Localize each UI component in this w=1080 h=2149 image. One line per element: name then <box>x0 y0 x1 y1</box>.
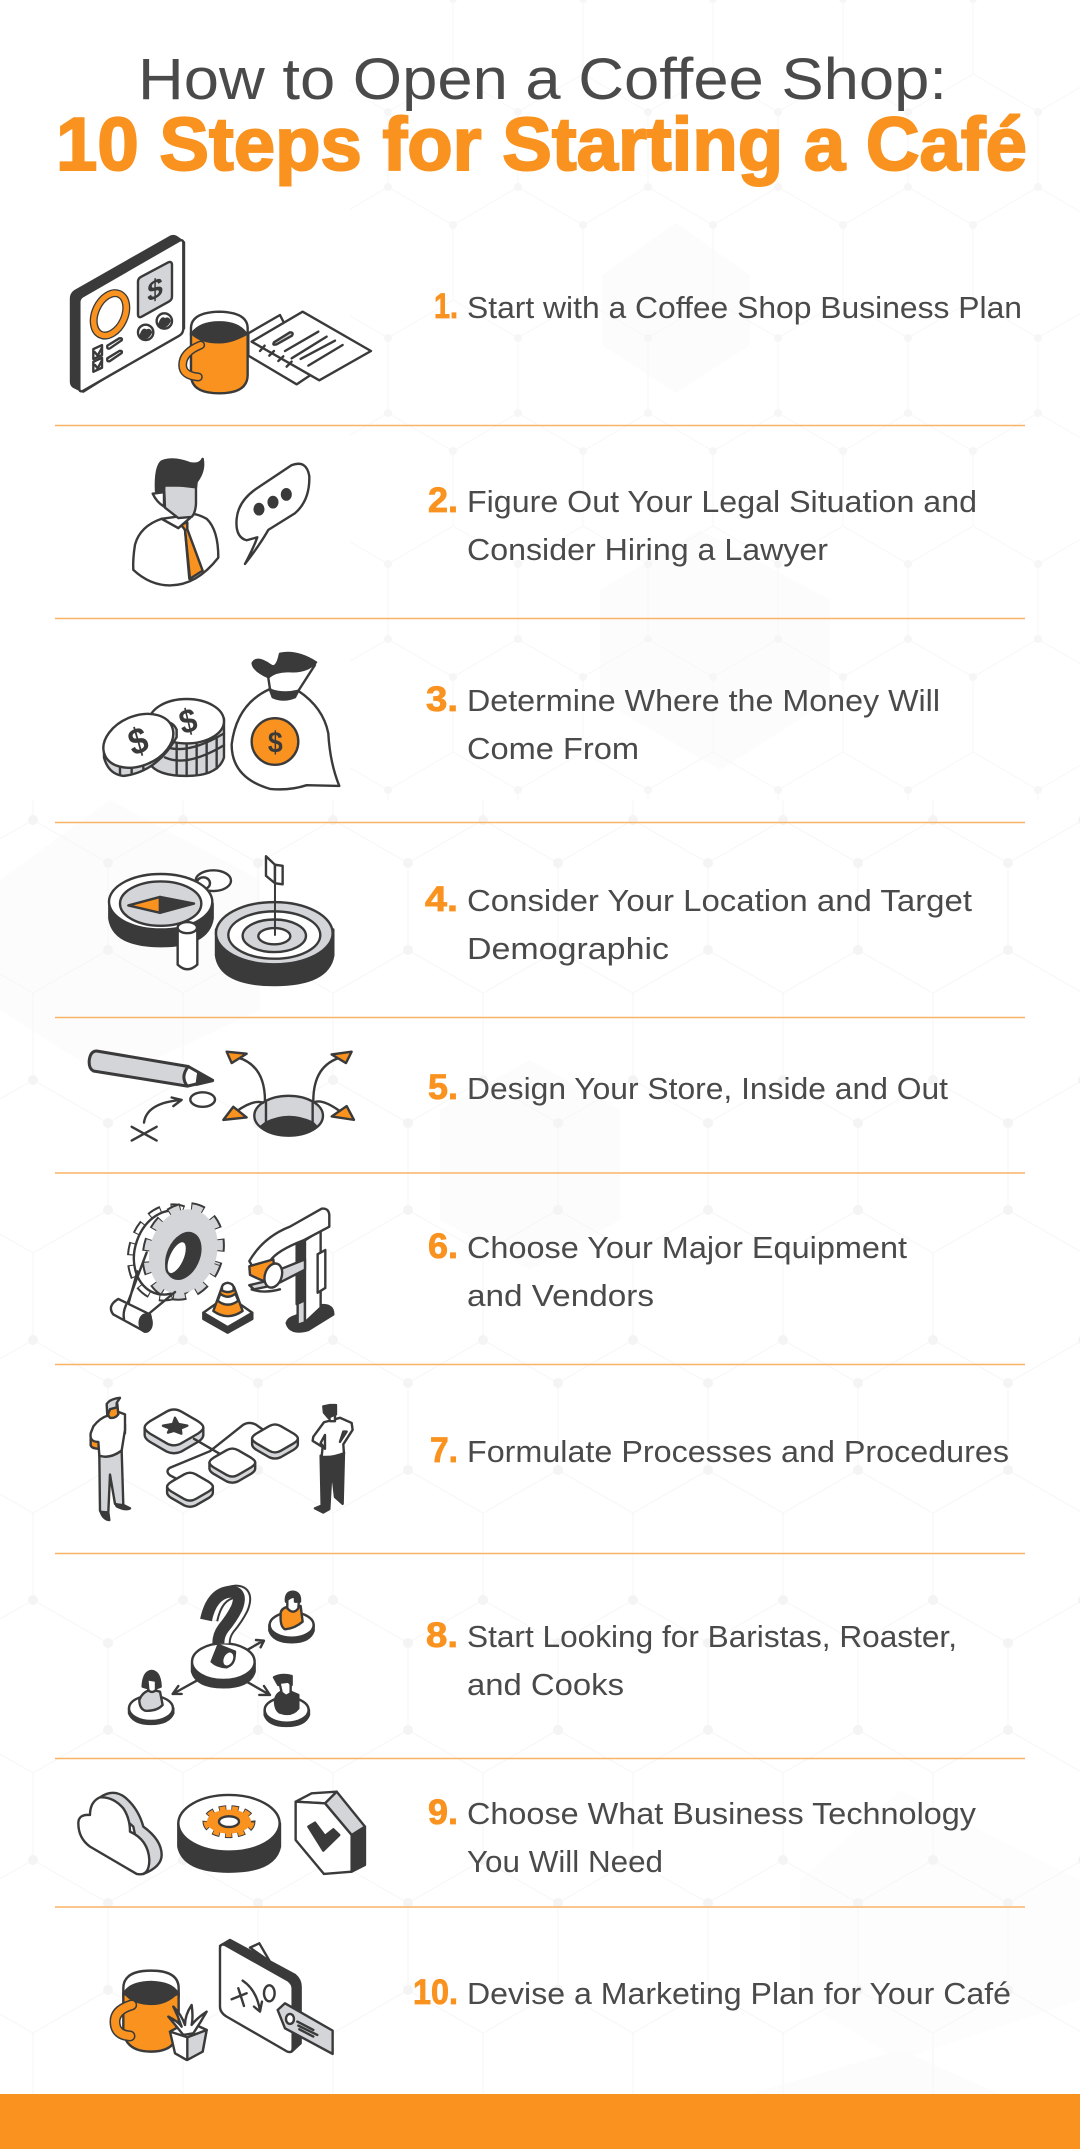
step 2 text <box>428 481 977 567</box>
icon: mug, plant, planning board and tag <box>115 1940 333 2060</box>
step 2 heading: Consider Hiring a Lawyer <box>467 532 828 567</box>
step 7 heading: Formulate Processes and Procedures <box>467 1434 1009 1469</box>
number 5: 5. <box>428 1068 458 1107</box>
step 4 heading: Demographic <box>467 931 669 966</box>
icon: coins and money bag <box>97 653 339 789</box>
title <box>56 47 1027 186</box>
step 8 text <box>426 1616 957 1702</box>
step 10 text <box>413 1973 1011 2012</box>
title line 1: How to Open a Coffee Shop: <box>138 47 947 112</box>
number 4: 4. <box>425 880 458 919</box>
icon: lawyer with speech bubble <box>133 459 309 585</box>
step 7 text <box>430 1431 1009 1470</box>
step 3 text <box>426 680 940 766</box>
step 9 text <box>428 1793 977 1879</box>
step 9 heading: You Will Need <box>467 1844 663 1879</box>
step 2 heading: Figure Out Your Legal Situation and <box>467 484 977 519</box>
step 9 heading: Choose What Business Technology <box>467 1796 977 1831</box>
number 8: 8. <box>426 1616 458 1655</box>
step 4 heading: Consider Your Location and Target <box>467 883 972 918</box>
icon: gear, cone and caliper <box>111 1198 333 1333</box>
section dividers <box>55 426 1025 1907</box>
step 6 text <box>428 1227 907 1313</box>
icon: coins and money bag: $ <box>268 725 283 759</box>
icon: coins and money bag: $ <box>124 719 153 764</box>
icon: flow chart with two people <box>90 1398 353 1520</box>
icon: cloud, gear disc and shield <box>78 1792 365 1874</box>
number 3: 3. <box>426 680 458 719</box>
footer bar <box>0 2094 1080 2149</box>
step 6 heading: and Vendors <box>467 1278 654 1313</box>
step 3 heading: Come From <box>467 731 639 766</box>
number 6: 6. <box>428 1227 458 1266</box>
step 6 heading: Choose Your Major Equipment <box>467 1230 907 1265</box>
step 10 heading: Devise a Marketing Plan for Your Café <box>467 1976 1011 2011</box>
step 8 heading: and Cooks <box>467 1667 624 1702</box>
step 4 text <box>425 880 972 966</box>
title line 2: 10 Steps for Starting a Café <box>56 102 1027 186</box>
number 7: 7. <box>430 1431 458 1470</box>
icon: business plan dashboard, mug and papers: $ <box>147 271 163 309</box>
number 10: 10. <box>413 1973 458 2012</box>
number 1: 1. <box>434 287 458 326</box>
step 5 heading: Design Your Store, Inside and Out <box>467 1071 948 1106</box>
icon: pencil, route and hole with arrows <box>89 1051 354 1141</box>
icon: question mark and three candidates <box>129 1592 314 1726</box>
step 5 text <box>428 1068 948 1107</box>
icon: business plan dashboard, mug and papers <box>71 236 371 393</box>
number 2: 2. <box>428 481 458 520</box>
step 1 heading: Start with a Coffee Shop Business Plan <box>467 290 1022 325</box>
icon: coins and money bag: $ <box>175 700 201 742</box>
number 9: 9. <box>428 1793 458 1832</box>
step 1 text <box>434 287 1022 326</box>
step 8 heading: Start Looking for Baristas, Roaster, <box>467 1619 957 1654</box>
icon: compass and target <box>109 856 333 985</box>
step 3 heading: Determine Where the Money Will <box>467 683 940 718</box>
